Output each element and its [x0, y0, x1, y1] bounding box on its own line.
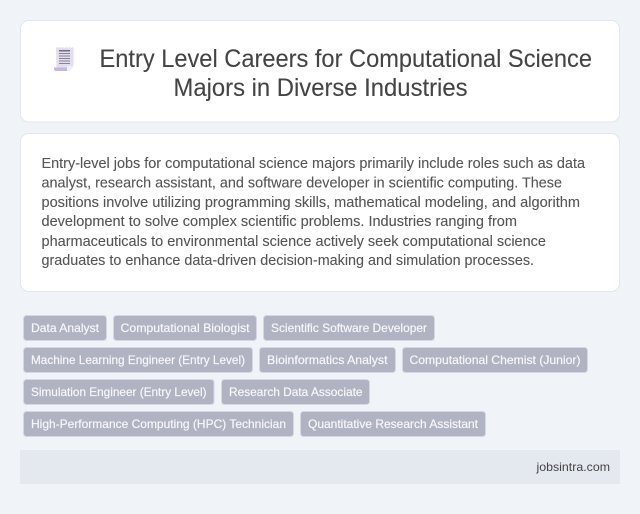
footer source text: jobsintra.com	[535, 460, 610, 474]
panel: title card	[20, 20, 620, 122]
title	[100, 45, 592, 102]
tag: HPC Technician	[24, 412, 294, 436]
description text: development to solve complex scientific problems. Industries ranging from	[42, 214, 517, 230]
tag: Bioinformatics Analyst	[260, 348, 396, 372]
tag: Research Data Associate	[222, 380, 370, 404]
description text: Entry-level jobs for computational science majors primarily include roles such as data	[42, 156, 586, 172]
tag: Quantitative Research Assistant	[300, 412, 486, 436]
tag: Scientific Software Developer: Scientific Software Developer	[271, 321, 427, 335]
tag: Research Data Associate: Research Data Associate	[229, 385, 363, 399]
tag: Computational Biologist: Computational Biologist	[120, 321, 250, 335]
description text: positions involve utilizing programming skills, mathematical modeling, and algorithm	[42, 195, 580, 211]
tag: Scientific Software Developer	[264, 316, 434, 340]
tag: Data Analyst	[24, 316, 106, 340]
panel: description card	[20, 134, 620, 292]
tag: Bioinformatics Analyst: Bioinformatics Analyst	[267, 353, 388, 367]
tag: Simulation Engineer	[24, 380, 214, 404]
tag: HPC Technician: High-Performance Computing (HPC) Technician	[31, 417, 286, 431]
tag: Computational Chemist: Computational Chemist (Junior)	[410, 353, 581, 367]
description text: graduates to enhance data-driven decision-making and simulation processes.	[42, 253, 534, 269]
description text: analyst, research assistant, and software developer in scientific computing. These	[42, 176, 562, 192]
tag: Machine Learning Engineer: Machine Learning Engineer (Entry Level)	[31, 353, 245, 367]
tag: Machine Learning Engineer	[24, 348, 252, 372]
tag: Computational Biologist	[114, 316, 256, 340]
tag: Simulation Engineer: Simulation Engineer (Entry Level)	[31, 385, 206, 399]
footer bar	[20, 450, 620, 484]
tag: Data Analyst: Data Analyst	[31, 321, 100, 335]
job tags	[24, 316, 588, 436]
description text: pharmaceuticals to environmental science actively seek computational science	[42, 234, 546, 250]
icon: document scroll	[54, 47, 74, 71]
title: Entry Level Careers for Computational Science	[100, 45, 592, 73]
title: Majors in Diverse Industries	[174, 74, 468, 102]
tag: Quantitative Research Assistant: Quantitative Research Assistant	[308, 417, 479, 431]
tag: Computational Chemist	[402, 348, 588, 372]
description text	[42, 156, 586, 269]
